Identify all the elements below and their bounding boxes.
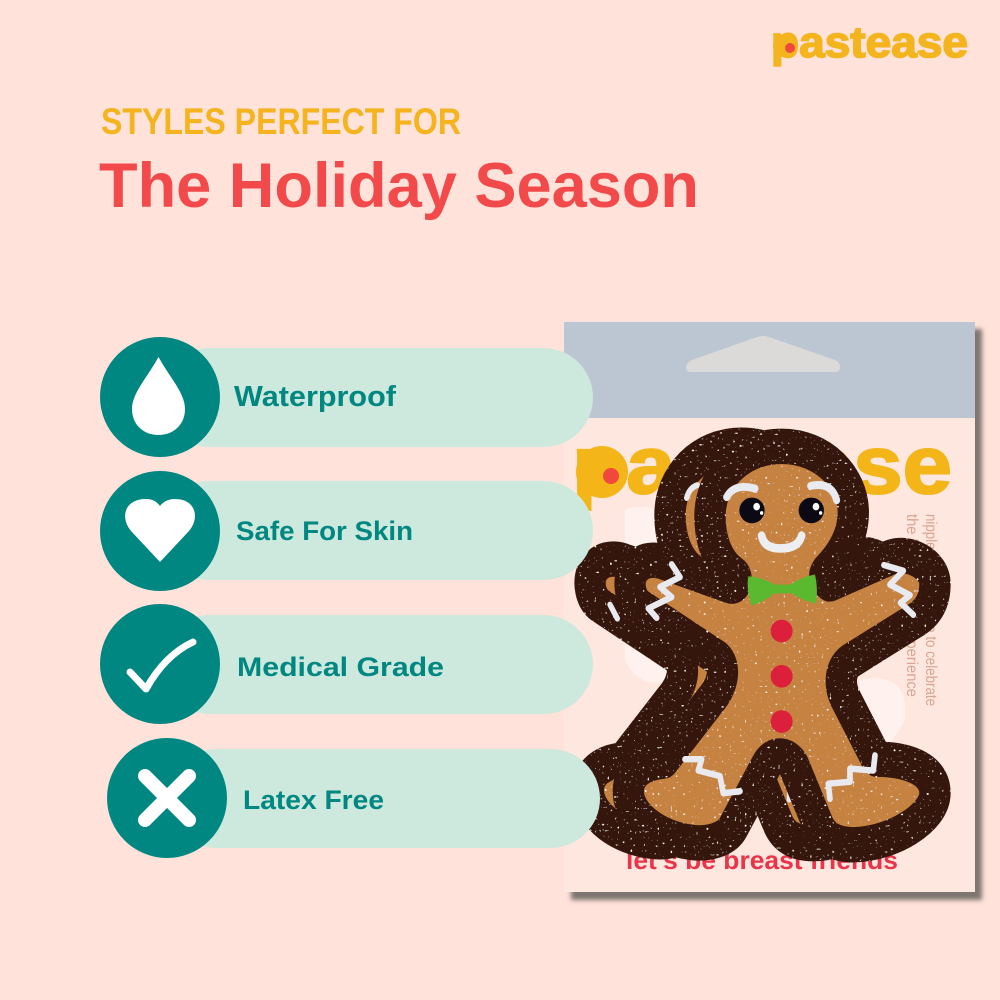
logo: pastease: pastease — [771, 18, 968, 67]
product package card: pastease — [572, 420, 952, 511]
green bow tie — [748, 574, 817, 605]
feature row: waterproof: Waterproof — [234, 381, 396, 413]
product package card: the breast friend experience — [903, 514, 920, 697]
feature row: medical grade: Medical Grade — [237, 652, 444, 682]
feature row: safe for skin — [100, 471, 593, 591]
front gingerbread body — [628, 446, 935, 845]
title: the holiday season: The Holiday Season — [99, 151, 699, 221]
product package card: nipple pasties made to celebrate — [922, 514, 939, 706]
back gingerbread — [588, 445, 895, 844]
icon: water drop — [132, 357, 185, 435]
icon: check mark — [130, 642, 193, 689]
gingerbread pasties — [588, 445, 935, 845]
product package card: let's be breast friends — [626, 845, 898, 875]
icing zigzags — [648, 564, 913, 799]
feature row: latex free — [107, 738, 600, 858]
eyes — [739, 498, 824, 523]
smile — [762, 536, 802, 548]
product package card — [564, 322, 982, 900]
feature row: medical grade — [100, 604, 593, 724]
feature row: latex free: Latex Free — [243, 785, 384, 815]
feature row: waterproof — [100, 337, 593, 457]
eyebrows — [727, 485, 837, 500]
icon: heart — [125, 499, 195, 562]
icon: cross — [145, 776, 189, 820]
heading: styles perfect for: STYLES PERFECT FOR — [101, 101, 461, 142]
feature row: safe for skin: Safe For Skin — [236, 516, 413, 546]
red buttons — [771, 620, 793, 733]
back gingerbread icing — [610, 485, 790, 800]
